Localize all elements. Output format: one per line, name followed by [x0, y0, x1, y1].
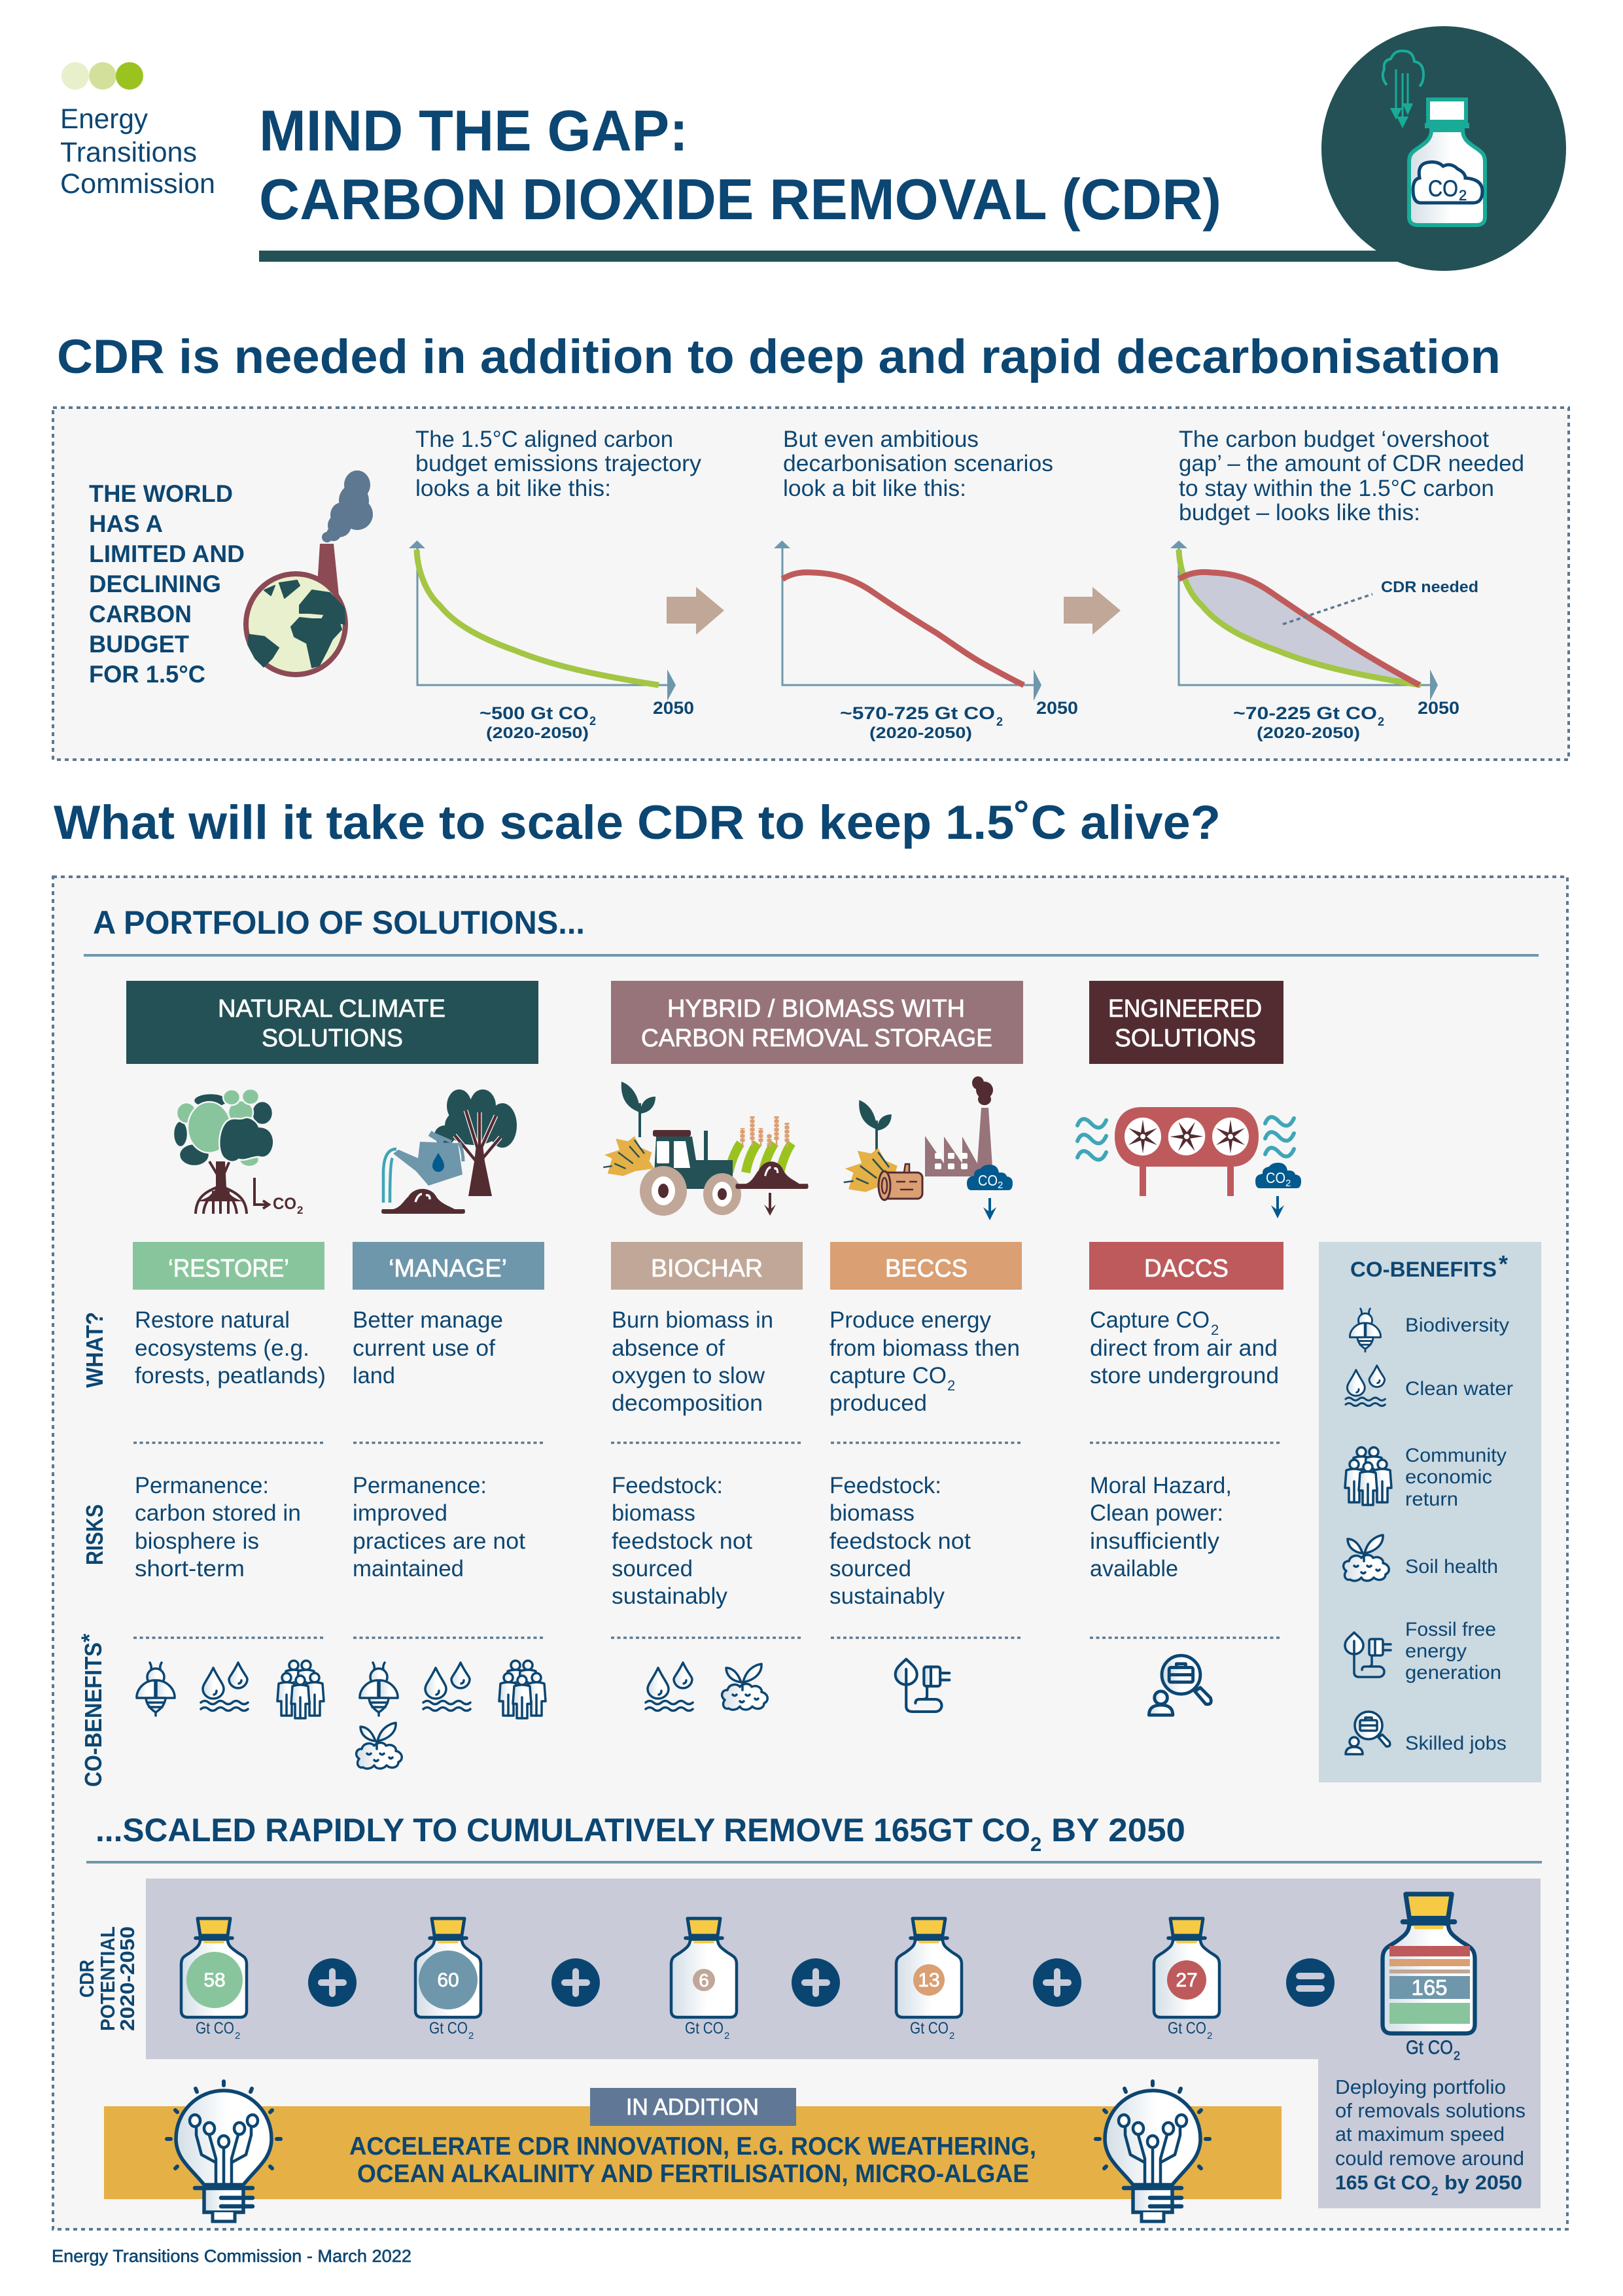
risks: BECCS: sourced: [829, 1556, 911, 1581]
heading: scaled rapidly: 2: [1030, 1833, 1041, 1856]
row label: CDR potential: [75, 1926, 139, 2031]
what: biochar: Burn biomass in: [612, 1307, 773, 1333]
operator: equals: [1286, 1958, 1335, 2007]
icon: DACCS air capture machine: 2: [1285, 1178, 1291, 1189]
bottle: DACCS 27: [1154, 1918, 1219, 2041]
header: manage: ‘MANAGE’: [389, 1255, 507, 1282]
legend: skilled jobs: Skilled jobs: [1405, 1733, 1507, 1754]
icon: innovation bulb right: [1096, 2081, 1210, 2221]
text: deploying portfolio: 2: [1431, 2185, 1439, 2199]
category: hybrid biomass: [611, 981, 1023, 1064]
bottle: total 165: Gt CO: [1406, 2037, 1453, 2058]
panel: carbon budget: [53, 408, 1569, 760]
risks: BECCS: sustainably: [829, 1583, 945, 1609]
header: DACCS: DACCS: [1144, 1255, 1229, 1282]
bottle: biochar 6: Gt CO: [685, 2019, 724, 2038]
icon: DACCS air capture machine: [1077, 1107, 1301, 1218]
risks: biochar: sourced: [612, 1556, 693, 1581]
category: natural climate solutions: [126, 981, 538, 1064]
chart 2 text: look a bit like this:: [783, 476, 966, 501]
bottle: BECCS 13: [896, 1918, 962, 2041]
legend: soil health: Soil health: [1405, 1556, 1498, 1578]
co-benefit icon: BECCS: [896, 1659, 949, 1712]
chart 2 text: But even ambitious: [783, 427, 979, 452]
text: deploying portfolio: could remove around: [1335, 2147, 1524, 2170]
bottle: biochar 6: 2: [724, 2030, 729, 2041]
operator: plus: [551, 1958, 600, 2007]
row label: CDR potential: 2020-2050: [116, 1926, 139, 2031]
chart 2 text: decarbonisation scenarios: [783, 451, 1053, 476]
risks: BECCS: biomass: [829, 1500, 915, 1526]
heading: CDR is needed: CDR is needed in addition to deep and rapid decarbonisation: [57, 330, 1501, 383]
what: BECCS: produced: [829, 1390, 927, 1416]
category: engineered solutions: ENGINEERED: [1108, 995, 1262, 1023]
title: MIND THE GAP:: [259, 98, 688, 163]
what: BECCS: [829, 1307, 1020, 1416]
risks: biochar: feedstock not: [612, 1528, 752, 1554]
chart 3 text: gap’ – the amount of CDR needed: [1179, 451, 1524, 476]
category: hybrid biomass: CARBON REMOVAL STORAGE: [641, 1025, 992, 1052]
what: biochar: decomposition: [612, 1390, 763, 1416]
arrow 1: [667, 587, 724, 635]
what: biochar: oxygen to slow: [612, 1363, 765, 1388]
risks: DACCS: Clean power:: [1090, 1500, 1223, 1526]
chart 3: overshoot gap: [1170, 540, 1478, 742]
what: manage: land: [353, 1363, 395, 1388]
bottle: total 165: [1383, 1894, 1475, 2062]
what: biochar: absence of: [612, 1335, 725, 1361]
chart 1: 1.5C trajectory: 2050: [653, 698, 694, 718]
what: BECCS: Produce energy: [829, 1307, 991, 1333]
legend: fossil free energy generation: Fossil free: [1405, 1619, 1496, 1640]
header: BECCS: [830, 1242, 1022, 1290]
chart 3 text: The carbon budget ‘overshoot: [1179, 427, 1489, 452]
text: the world has a limited and declining carbon budget: FOR 1.5°C: [89, 661, 205, 688]
bottle: biochar 6: 6: [699, 1970, 709, 1990]
legend: soil health: [1344, 1535, 1498, 1581]
icon: restore tree: [173, 1089, 303, 1216]
operator: plus: [792, 1958, 840, 2007]
legend: clean water: Clean water: [1405, 1378, 1513, 1400]
chart 2: ambitious scenarios: 2: [996, 715, 1003, 728]
icon: BECCS factory and biomass: 2: [998, 1180, 1003, 1191]
header: biochar: [611, 1242, 803, 1290]
header: DACCS: [1089, 1242, 1283, 1290]
legend: community economic return: return: [1405, 1489, 1458, 1510]
risks: DACCS: available: [1090, 1556, 1178, 1581]
risks: DACCS: insufficiently: [1090, 1528, 1220, 1554]
what: manage: current use of: [353, 1335, 495, 1361]
bottle: restore 58: [181, 1918, 247, 2041]
chart 2: ambitious scenarios: (2020-2050): [869, 724, 972, 742]
panel: co-benefits legend: [1319, 1242, 1541, 1782]
risks: restore: short-term: [135, 1556, 245, 1581]
icon: restore tree: CO: [273, 1195, 296, 1213]
bottle: manage 60: 2: [468, 2030, 474, 2041]
tag: in addition: [590, 2088, 796, 2126]
text: accelerate CDR innovation: ACCELERATE CDR INNOVATION, E.G. ROCK WEATHERING,: [349, 2132, 1036, 2161]
chart 1: 1.5C trajectory: ~500 Gt CO: [480, 703, 589, 723]
heading: what will it take: What will it take to scale CDR to keep 1.5˚C alive?: [54, 796, 1221, 849]
title: CARBON DIOXIDE REMOVAL (CDR): [259, 167, 1221, 232]
legend: community economic return: [1345, 1445, 1507, 1510]
text: the world has a limited and declining carbon budget: [89, 480, 245, 688]
heading: scaled rapidly: BY 2050: [1051, 1812, 1185, 1848]
header: BECCS: BECCS: [885, 1255, 968, 1282]
panel: co-benefits legend: *: [1499, 1250, 1508, 1277]
what: restore: [135, 1307, 326, 1388]
legend: community economic return: Community: [1405, 1445, 1507, 1466]
text: the world has a limited and declining carbon budget: CARBON: [89, 601, 192, 627]
category: engineered solutions: SOLUTIONS: [1115, 1025, 1256, 1052]
tag: in addition: IN ADDITION: [626, 2094, 759, 2120]
text: accelerate CDR innovation: OCEAN ALKALINITY AND FERTILISATION, MICRO-ALGAE: [357, 2160, 1029, 2188]
chart 2: ambitious scenarios: [774, 540, 1078, 742]
risks: DACCS: [1090, 1473, 1232, 1581]
bottle: restore 58: Gt CO: [196, 2019, 234, 2038]
operator: plus: [1033, 1958, 1081, 2007]
risks: BECCS: feedstock not: [829, 1528, 971, 1554]
panel: co-benefits legend: CO-BENEFITS: [1350, 1258, 1497, 1281]
risks: restore: [135, 1473, 301, 1581]
what: biochar: [612, 1307, 773, 1416]
bottle: total 165: 165: [1411, 1975, 1448, 2000]
co-benefit icons: biochar: [646, 1663, 767, 1710]
panel: portfolio and scale: [53, 877, 1567, 2229]
row label: CDR potential: CDR: [75, 1960, 98, 1998]
risks: biochar: sustainably: [612, 1583, 727, 1609]
what: DACCS: [1090, 1307, 1279, 1388]
legend: clean water: [1346, 1366, 1513, 1406]
logo: Energy Transitions Commission: [60, 62, 215, 200]
logo: Energy Transitions Commission: Commission: [60, 168, 215, 200]
legend: fossil free energy generation: energy: [1405, 1640, 1467, 1662]
text: deploying portfolio: at maximum speed: [1335, 2123, 1505, 2146]
chart 3 text: budget – looks like this:: [1179, 500, 1420, 525]
bottle: restore 58: 58: [203, 1969, 226, 1991]
risks: restore: biosphere is: [135, 1528, 259, 1554]
risks: restore: Permanence:: [135, 1473, 269, 1498]
bottle: manage 60: 60: [437, 1969, 459, 1991]
text: deploying portfolio: by 2050: [1444, 2171, 1522, 2194]
icon: DACCS air capture machine: CO: [1266, 1169, 1285, 1186]
what: restore: ecosystems (e.g.: [135, 1335, 309, 1361]
chart 1 text: The 1.5°C aligned carbon: [415, 427, 673, 452]
row label: co-benefits: CO-BENEFITS: [80, 1642, 107, 1787]
legend: biodiversity: [1350, 1309, 1509, 1352]
what: BECCS: 2: [947, 1377, 955, 1394]
row label: risks: RISKS: [81, 1504, 108, 1565]
bottle: biochar 6: [671, 1918, 737, 2041]
risks: manage: maintained: [353, 1556, 464, 1581]
what: DACCS: direct from air and: [1090, 1335, 1278, 1361]
text: deploying portfolio: Deploying portfolio: [1335, 2075, 1506, 2098]
what: DACCS: Capture CO: [1090, 1307, 1210, 1333]
chart 1 text: looks a bit like this:: [415, 476, 611, 501]
what: manage: Better manage: [353, 1307, 503, 1333]
category: hybrid biomass: HYBRID / BIOMASS WITH: [667, 995, 965, 1023]
logo: Energy Transitions Commission: Transitions: [60, 137, 197, 168]
text: the world has a limited and declining carbon budget: BUDGET: [89, 631, 189, 658]
what: DACCS: 2: [1211, 1322, 1219, 1338]
risks: biochar: biomass: [612, 1500, 695, 1526]
bottle: BECCS 13: 13: [918, 1969, 940, 1991]
risks: manage: [353, 1473, 525, 1581]
icon: header bottle capturing carbon: 2: [1459, 187, 1467, 203]
bottle: DACCS 27: 27: [1176, 1969, 1198, 1991]
bottle: BECCS 13: Gt CO: [910, 2019, 949, 2038]
category: engineered solutions: [1089, 981, 1283, 1064]
chart 2: ambitious scenarios: 2050: [1036, 698, 1078, 718]
chart 3: overshoot gap: 2: [1378, 715, 1384, 728]
title: [259, 98, 1221, 232]
what: BECCS: capture CO: [829, 1363, 947, 1388]
what: DACCS: store underground: [1090, 1363, 1279, 1388]
text: deploying portfolio: [1335, 2075, 1526, 2199]
icon: biochar tractor: [603, 1082, 809, 1216]
risks: restore: carbon stored in: [135, 1500, 301, 1526]
chart 1: 1.5C trajectory: 2: [589, 715, 596, 728]
row label: CDR potential: POTENTIAL: [96, 1926, 119, 2031]
arrow 2: [1064, 587, 1121, 635]
chart 3 text: to stay within the 1.5°C carbon: [1179, 476, 1494, 501]
chart 1: 1.5C trajectory: (2020-2050): [486, 724, 589, 742]
co-benefit icons: manage: [357, 1661, 546, 1769]
chart 2 text: [783, 427, 1053, 501]
heading: scaled rapidly: ...SCALED RAPIDLY TO CUMULATIVELY REMOVE 165GT CO: [96, 1812, 1030, 1848]
legend: fossil free energy generation: generation: [1405, 1662, 1501, 1684]
what: restore: Restore natural: [135, 1307, 290, 1333]
icon: smoking globe: [246, 470, 373, 675]
chart 1 text: [415, 427, 701, 501]
chart 3 text: [1179, 427, 1524, 525]
icon: BECCS factory and biomass: CO: [978, 1172, 998, 1189]
legend: fossil free energy generation: [1345, 1619, 1501, 1684]
title underline bar: [259, 251, 1430, 262]
bottle: manage 60: Gt CO: [429, 2019, 468, 2038]
chart 3: overshoot gap: 2050: [1418, 698, 1459, 718]
risks: BECCS: [829, 1473, 971, 1609]
what: BECCS: from biomass then: [829, 1335, 1020, 1361]
legend: community economic return: economic: [1405, 1466, 1492, 1488]
header: manage: [353, 1242, 544, 1290]
bottle: restore 58: 2: [235, 2030, 240, 2041]
risks: manage: Permanence:: [353, 1473, 487, 1498]
bottle: DACCS 27: Gt CO: [1168, 2019, 1206, 2038]
chart 1 text: budget emissions trajectory: [415, 451, 701, 476]
risks: biochar: [612, 1473, 752, 1609]
footer: Energy Transitions Commission - March 2022: [52, 2246, 411, 2266]
category: natural climate solutions: SOLUTIONS: [262, 1025, 403, 1052]
bottle: total 165: 2: [1454, 2049, 1460, 2062]
bottle: BECCS 13: 2: [949, 2030, 954, 2041]
chart 3: overshoot gap: CDR needed: [1381, 578, 1478, 596]
risks: biochar: Feedstock:: [612, 1473, 723, 1498]
row label: what: WHAT?: [81, 1312, 108, 1388]
what: restore: forests, peatlands): [135, 1363, 326, 1388]
bottle: manage 60: [415, 1918, 481, 2041]
what: manage: [353, 1307, 503, 1388]
bottle: DACCS 27: 2: [1207, 2030, 1212, 2041]
text: the world has a limited and declining carbon budget: LIMITED AND: [89, 540, 245, 567]
header: biochar: BIOCHAR: [651, 1255, 763, 1282]
risks: manage: improved: [353, 1500, 447, 1526]
chart 3: overshoot gap: (2020-2050): [1257, 724, 1360, 742]
header: restore: ‘RESTORE’: [168, 1255, 289, 1282]
text: deploying portfolio: 165 Gt CO: [1335, 2171, 1431, 2194]
text: the world has a limited and declining carbon budget: THE WORLD: [89, 480, 233, 507]
chart 3: overshoot gap: ~70-225 Gt CO: [1233, 703, 1377, 723]
risks: manage: practices are not: [353, 1528, 525, 1554]
chart 1: 1.5C trajectory: [409, 540, 694, 742]
co-benefit icon: DACCS: [1149, 1655, 1211, 1715]
text: the world has a limited and declining carbon budget: DECLINING: [89, 571, 221, 597]
text: accelerate CDR innovation: [349, 2132, 1036, 2188]
legend: skilled jobs: [1346, 1712, 1507, 1754]
risks: DACCS: Moral Hazard,: [1090, 1473, 1232, 1498]
band: in addition: [104, 2088, 1282, 2199]
header: restore: [133, 1242, 324, 1290]
icon: restore tree: 2: [297, 1204, 303, 1216]
category: natural climate solutions: NATURAL CLIMATE: [218, 995, 445, 1023]
row label: co-benefits: *: [77, 1633, 102, 1642]
icon: header bottle capturing carbon: [1321, 26, 1566, 271]
icon: BECCS factory and biomass: [844, 1076, 1013, 1220]
icon: header bottle capturing carbon: CO: [1428, 176, 1458, 202]
icon: innovation bulb left: [167, 2081, 281, 2221]
text: the world has a limited and declining carbon budget: HAS A: [89, 510, 163, 537]
heading: a portfolio of solutions: A PORTFOLIO OF SOLUTIONS...: [93, 904, 585, 941]
operator: plus: [308, 1958, 357, 2007]
chart 2: ambitious scenarios: ~570-725 Gt CO: [840, 703, 995, 723]
legend: biodiversity: Biodiversity: [1405, 1315, 1509, 1336]
logo: Energy Transitions Commission: Energy: [60, 103, 148, 135]
risks: BECCS: Feedstock:: [829, 1473, 941, 1498]
icon: manage tree and watering can: [381, 1089, 517, 1214]
panel: CDR potential band: [146, 1879, 1541, 2208]
co-benefit icons: restore: [137, 1661, 324, 1718]
text: deploying portfolio: of removals solutions: [1335, 2099, 1526, 2122]
